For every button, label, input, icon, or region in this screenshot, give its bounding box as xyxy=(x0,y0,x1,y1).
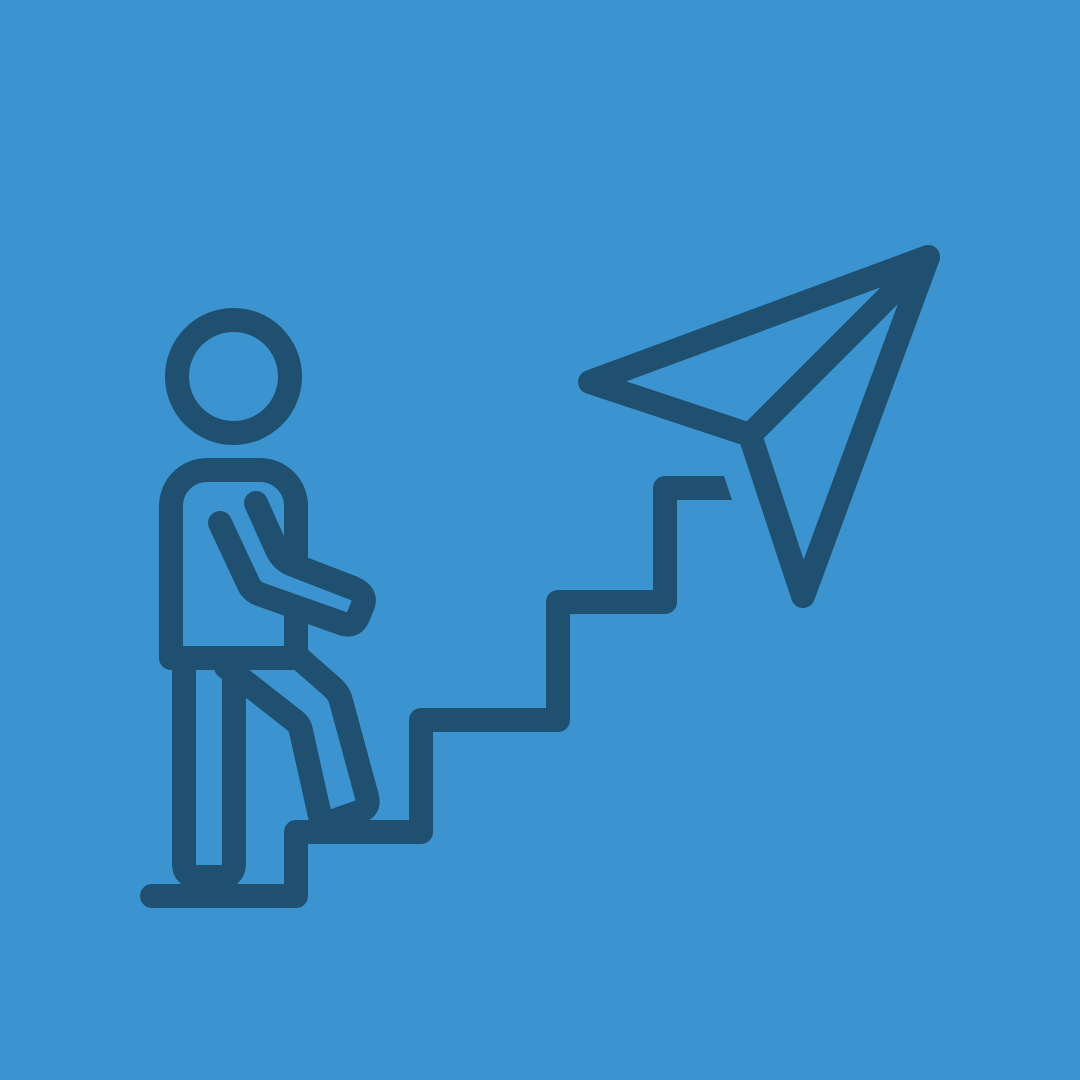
icon: paper plane xyxy=(590,257,928,596)
plane fold xyxy=(750,257,928,435)
standing leg xyxy=(184,660,234,877)
plane outline xyxy=(590,257,928,596)
icon: stairs end cut xyxy=(723,476,732,500)
icon: stairs start cap xyxy=(152,884,170,908)
icon: person xyxy=(171,320,368,877)
arm xyxy=(220,503,364,625)
torso xyxy=(171,470,296,658)
head xyxy=(177,320,290,433)
icon: stairs xyxy=(152,488,724,896)
raised leg xyxy=(226,657,368,825)
